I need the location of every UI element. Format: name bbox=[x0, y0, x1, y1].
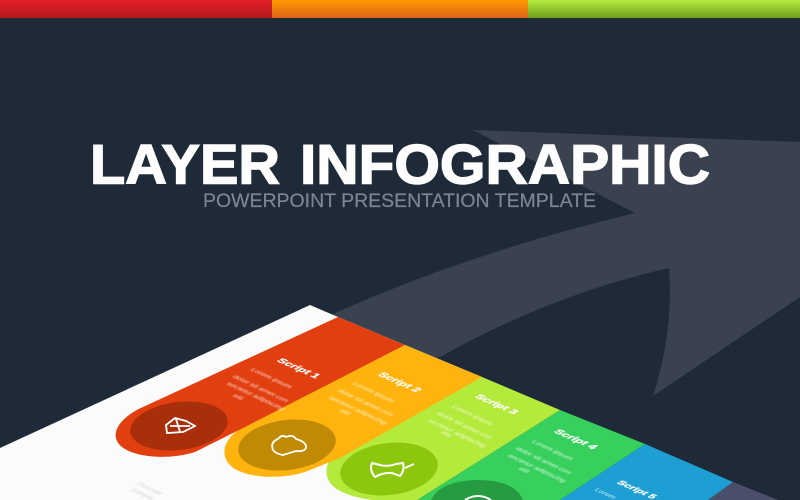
orange dark circle bbox=[235, 414, 339, 476]
red body text: sectetur adipiscing bbox=[224, 381, 287, 411]
band 4: green bbox=[417, 410, 645, 500]
green body text: Lorem ipsum bbox=[529, 439, 575, 461]
orange body text bbox=[326, 381, 396, 425]
orange heading: Script 2 bbox=[375, 371, 424, 394]
orange icon bbox=[272, 436, 306, 455]
red heading: Script 1 bbox=[274, 357, 323, 380]
red body text bbox=[224, 367, 294, 411]
lime body text: Lorem ipsum bbox=[449, 404, 495, 426]
red body text: elit bbox=[230, 393, 246, 401]
band 3: lime bbox=[326, 377, 560, 500]
red dark circle bbox=[127, 396, 231, 456]
band 5: blue bbox=[560, 444, 733, 500]
band 2: orange bbox=[224, 345, 482, 477]
lime icon bbox=[371, 463, 414, 477]
green heading: Script 4 bbox=[551, 428, 601, 451]
background arrow bbox=[320, 130, 800, 400]
orange body text: sectetur adipiscing bbox=[326, 395, 389, 425]
red body text: Lorem ipsum bbox=[248, 367, 294, 389]
green icon bbox=[465, 496, 491, 500]
green body text: sectetur adipiscing bbox=[505, 453, 568, 483]
orange body text: Lorem ipsum bbox=[350, 381, 396, 403]
orange body text: dolor sit amet con bbox=[335, 388, 396, 417]
title: INFOGRAPHIC bbox=[300, 132, 710, 196]
blue heading: Script 5 bbox=[614, 480, 659, 500]
green body text bbox=[505, 439, 575, 483]
green body text: dolor sit amet con bbox=[513, 446, 574, 475]
lime body text: elit bbox=[438, 430, 454, 438]
lime heading: Script 3 bbox=[472, 393, 521, 416]
lime body text: sectetur adipiscing bbox=[425, 418, 488, 448]
lime dark circle bbox=[337, 437, 441, 500]
title bbox=[90, 132, 710, 196]
lime body text: dolor sit amet con bbox=[434, 411, 495, 440]
orange body text: elit bbox=[337, 408, 353, 416]
band 1: red bbox=[116, 317, 405, 457]
red body text: dolor sit amet con bbox=[230, 374, 291, 403]
subtitle: POWERPOINT PRESENTATION TEMPLATE bbox=[203, 191, 596, 212]
band 6: purple bbox=[708, 482, 778, 500]
green dark circle bbox=[431, 480, 523, 500]
blue body text: Lorem bbox=[592, 487, 618, 500]
red icon bbox=[166, 418, 195, 433]
green body text: elit bbox=[516, 466, 532, 474]
faint slide caption: Descript bbox=[134, 482, 164, 496]
lime body text bbox=[425, 404, 495, 448]
title: LAYER bbox=[90, 132, 280, 196]
top colour bar bbox=[0, 0, 800, 18]
white isometric slide bbox=[0, 305, 482, 500]
faint slide caption bbox=[128, 482, 164, 500]
